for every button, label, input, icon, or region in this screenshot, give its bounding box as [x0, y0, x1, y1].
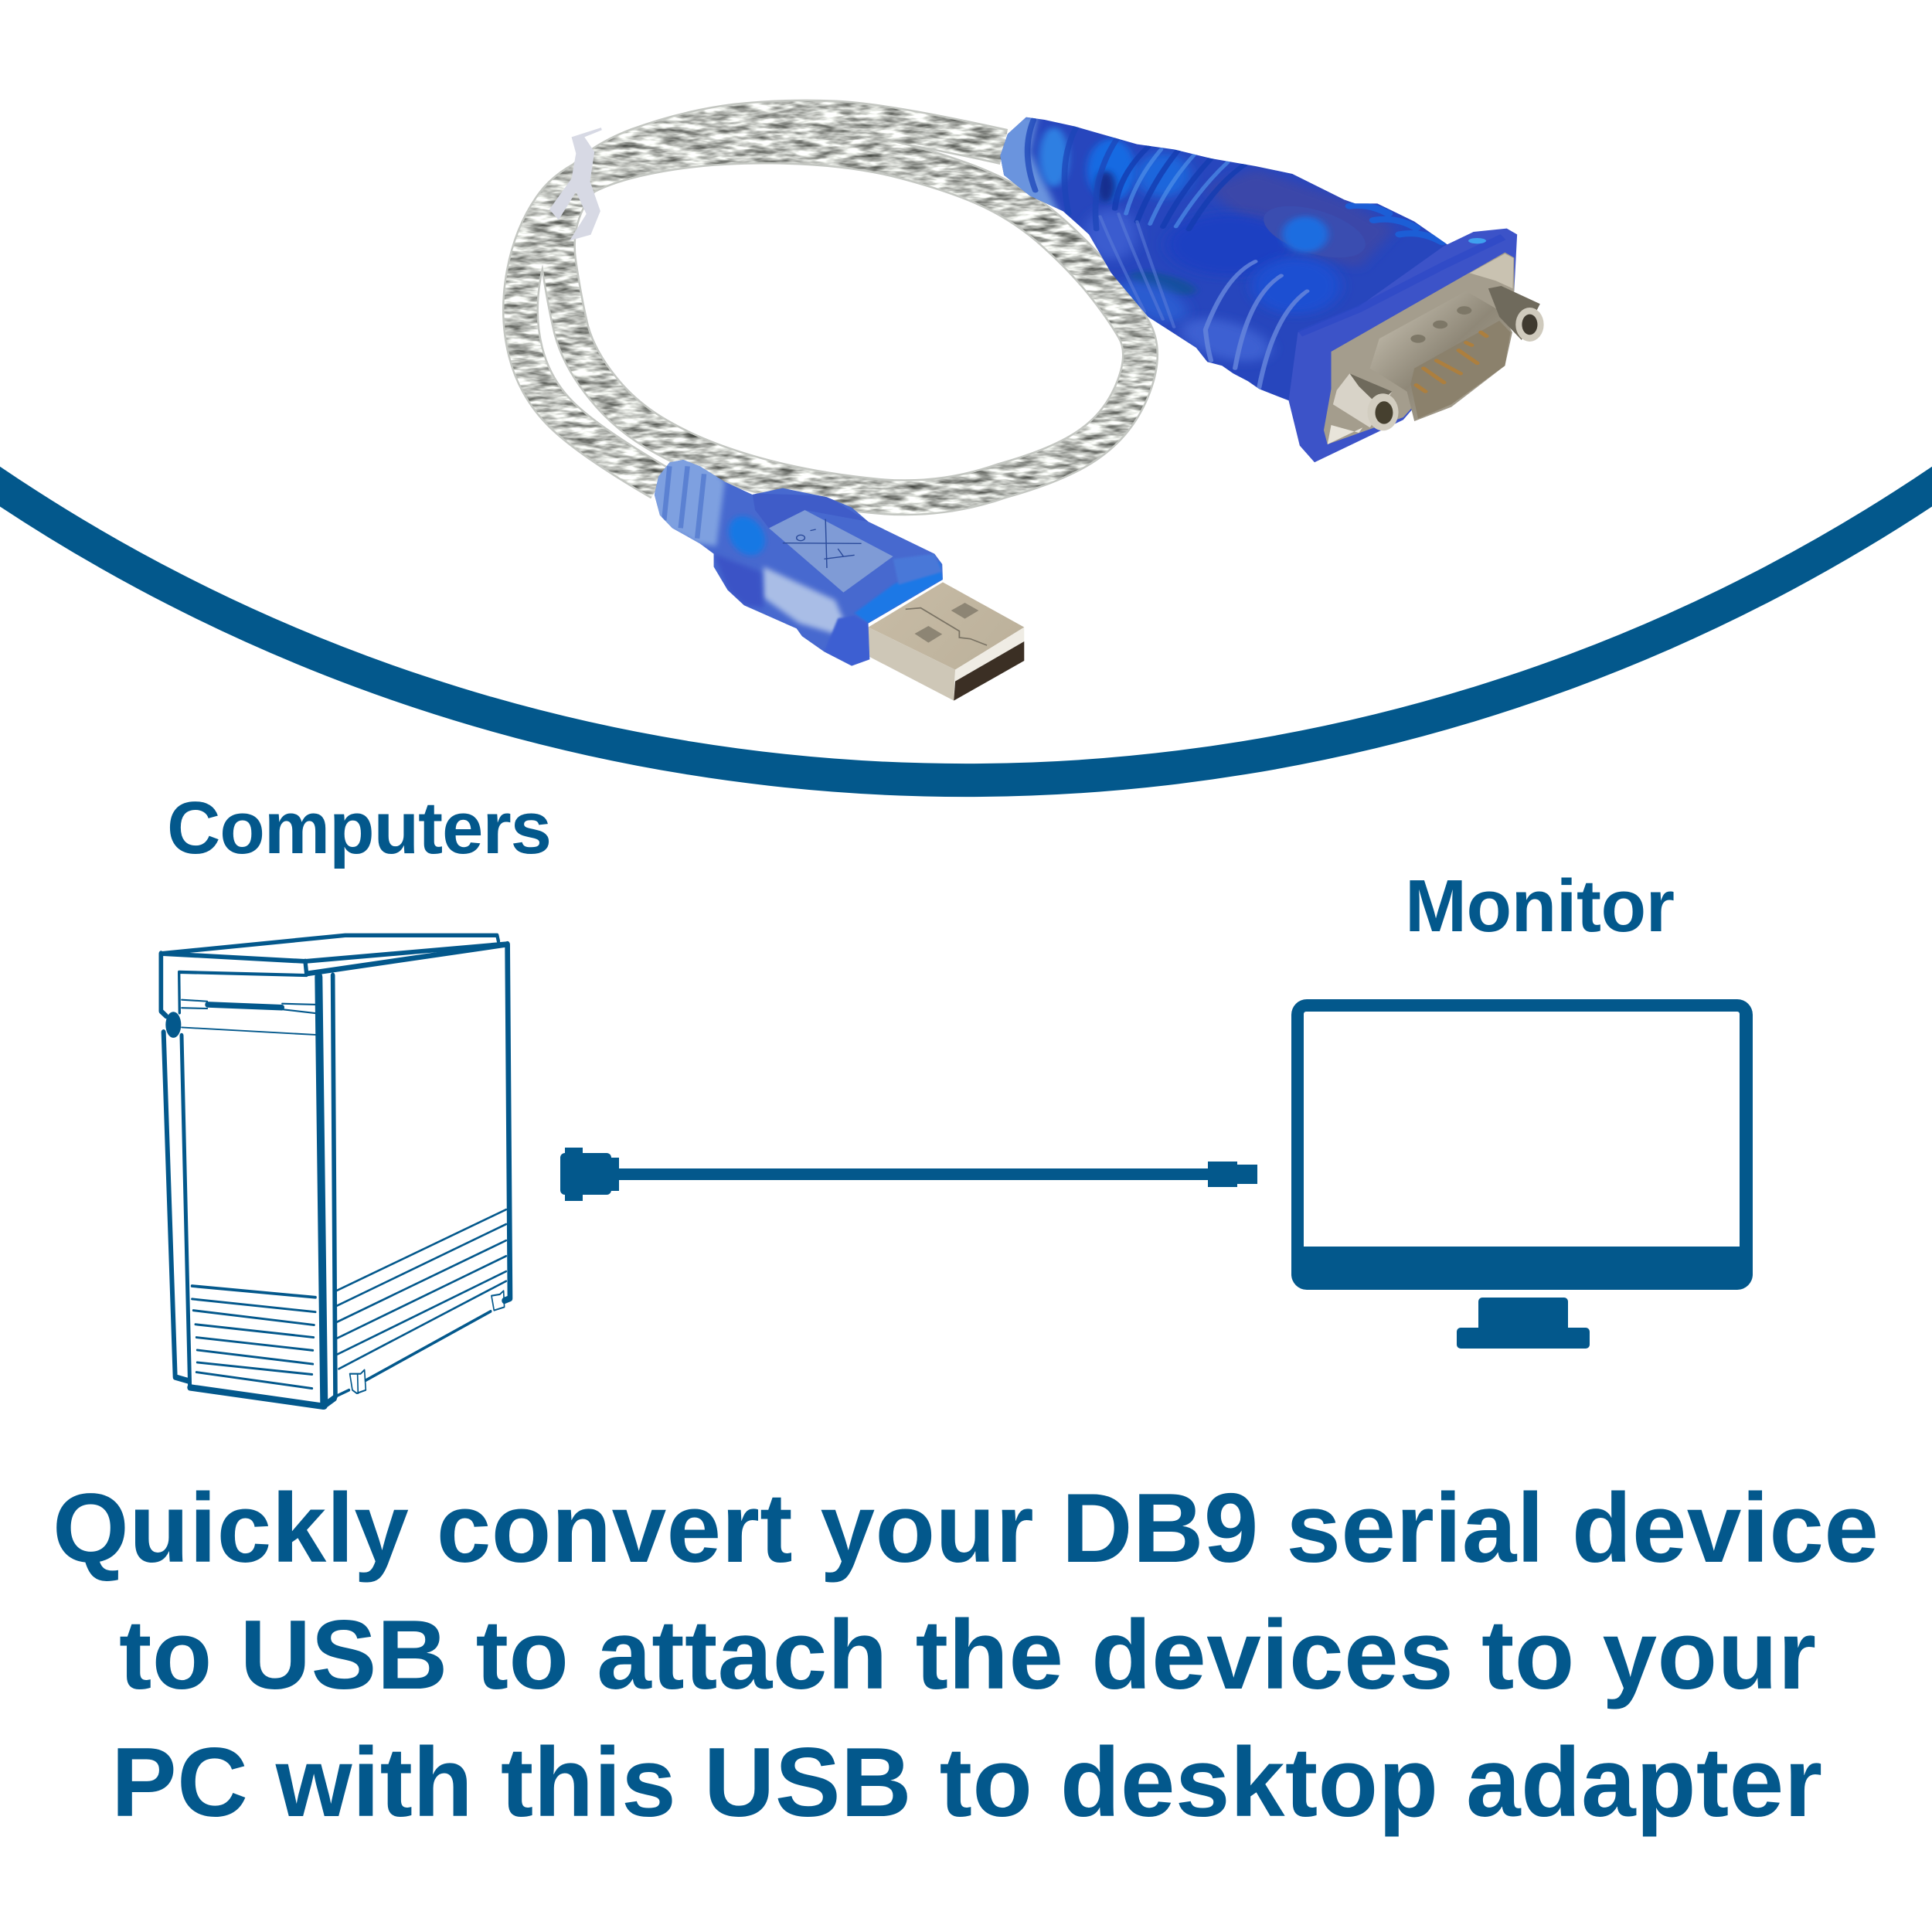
thumb bump [1252, 196, 1377, 268]
power button [165, 1012, 181, 1038]
metal face plate [1324, 253, 1514, 444]
DB9 connector housing [989, 111, 1544, 462]
connector cable icon [560, 1148, 1257, 1201]
metal shell [869, 582, 1024, 670]
curved divider arc [0, 454, 1932, 781]
drive bay [182, 1000, 317, 1013]
lower screw post [1333, 373, 1399, 430]
shell windows [951, 603, 978, 619]
cable coil [520, 117, 1141, 498]
feet [350, 1370, 366, 1393]
headline line 3: PC with this USB to desktop adapter [111, 1727, 1822, 1837]
icon: monitor [1291, 999, 1753, 1349]
grip [650, 456, 725, 546]
top face [769, 510, 893, 593]
stand neck [1478, 1298, 1568, 1336]
blue reflections [726, 513, 768, 558]
headline line 2: to USB to attach the devices to your [119, 1600, 1816, 1709]
D-shell [1370, 291, 1512, 421]
shell seam [906, 608, 987, 645]
headline text [53, 1473, 1879, 1837]
screen bezel [1291, 999, 1753, 1290]
USB plug [634, 448, 1024, 701]
USB plug end [1208, 1162, 1257, 1187]
product photo: USB to DB9 adapter cable [520, 111, 1544, 701]
upper screw post [1488, 286, 1544, 342]
ridges by flange [1349, 206, 1442, 242]
front panel outlines [161, 954, 166, 1016]
icon: computer tower [161, 935, 510, 1406]
roof [161, 935, 498, 954]
lower ribs [1206, 261, 1307, 388]
cable tie [549, 128, 602, 240]
flange [1289, 229, 1517, 462]
top dome [1207, 168, 1396, 268]
dark side edge [714, 554, 764, 608]
shell dimples [1410, 306, 1471, 343]
gold pins [1417, 332, 1486, 392]
DB9 plug end [560, 1148, 619, 1201]
upper ribs [1028, 120, 1442, 388]
headline line 1: Quickly convert your DB9 serial device [53, 1473, 1879, 1583]
strain relief tones [1000, 117, 1062, 210]
embossed USB logo [783, 519, 862, 568]
cable line [618, 1168, 1209, 1180]
side vents [336, 1209, 506, 1369]
label: Computers: Computers [167, 787, 552, 869]
front vents [192, 1286, 315, 1298]
moulded body [1000, 117, 1447, 400]
stand base [1457, 1328, 1590, 1349]
side panel [505, 944, 510, 1301]
overmold [654, 460, 943, 666]
core tones [1167, 214, 1292, 276]
pale side patch [764, 566, 852, 639]
label: Monitor: Monitor [1405, 865, 1675, 947]
